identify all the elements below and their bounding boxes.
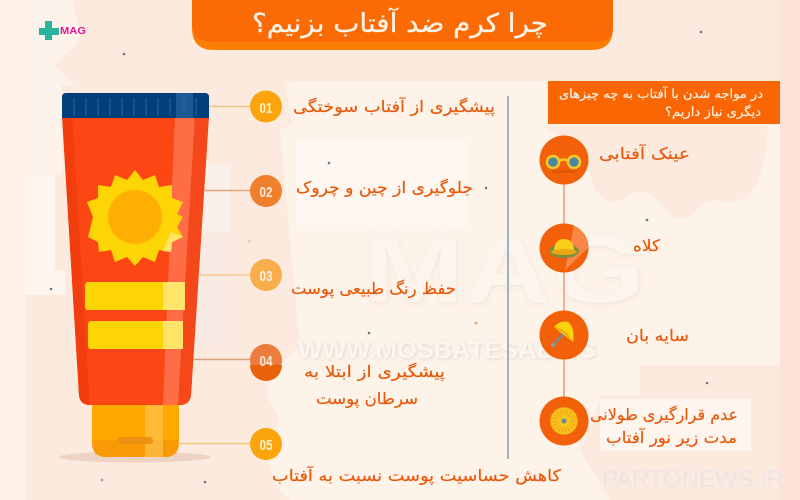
- benefit 4: [304, 362, 445, 409]
- icon: hat: [540, 224, 588, 272]
- icon: umbrella: [540, 310, 588, 360]
- icon: green cross: [39, 21, 59, 40]
- watermark: MAG: [363, 214, 645, 323]
- badge 03: [250, 259, 282, 291]
- connector lines: [178, 106, 252, 444]
- vertical divider: [507, 96, 509, 459]
- label: avoid long exposure: [590, 399, 751, 451]
- label: avoid long exposure: مدت زیر نور آفتاب: [606, 428, 737, 448]
- benefit 5: کاهش حساسیت پوست نسبت به آفتاب: [272, 466, 561, 486]
- watermark: [298, 214, 645, 364]
- badge 02: 02: [260, 184, 272, 201]
- tube shadow: [59, 452, 211, 462]
- badge 05: [250, 428, 282, 460]
- tube nozzle cap: [92, 402, 179, 457]
- logo text: MAG: [60, 25, 86, 37]
- watermark: WWW.MOSBATESABZ.C: [298, 337, 596, 364]
- logo: [39, 21, 86, 40]
- benefit 4: پیشگیری از ابتلا به: [304, 362, 445, 382]
- callout: question box: دیگری نیاز داریم؟: [665, 104, 761, 120]
- label: avoid long exposure: عدم قرارگیری طولانی: [590, 405, 738, 425]
- tube cap band: [62, 93, 209, 118]
- title: چرا کرم ضد آفتاب بزنیم؟: [252, 7, 548, 39]
- tube body: [62, 115, 209, 405]
- label: parasol: سایه بان: [626, 326, 689, 345]
- yellow label stripes: [85, 282, 185, 310]
- label: hat: کلاه: [633, 236, 660, 255]
- label: sunglasses: عینک آفتابی: [599, 144, 690, 163]
- badge 04: [250, 344, 282, 381]
- badge 01: 01: [260, 100, 272, 117]
- icon: sunglasses: [540, 136, 588, 184]
- benefit 1: پیشگیری از آفتاب سوختگی: [293, 97, 495, 117]
- sunscreen tube: [59, 93, 211, 462]
- callout: question box: در مواجه شدن با آفتاب به چه چیزهای: [559, 86, 763, 102]
- title banner: [192, 0, 613, 50]
- timeline connector: [563, 180, 565, 420]
- benefit texts: [272, 97, 561, 486]
- benefit 2: جلوگیری از چین و چروک: [296, 178, 473, 198]
- badge 03: 03: [260, 268, 272, 285]
- icon: clock: [540, 396, 588, 446]
- badge 04: 04: [260, 353, 273, 370]
- badge 01: [250, 90, 282, 122]
- icon: sun: [87, 170, 183, 266]
- decorative dots: [50, 31, 708, 483]
- benefit 3: حفظ رنگ طبیعی پوست: [291, 279, 456, 299]
- badge 02: [250, 175, 282, 207]
- badge 05: 05: [260, 437, 272, 454]
- partonews watermark: PARTONEWS.IR: [602, 466, 784, 493]
- benefit 4: سرطان پوست: [316, 389, 418, 409]
- callout: question box: [548, 81, 780, 124]
